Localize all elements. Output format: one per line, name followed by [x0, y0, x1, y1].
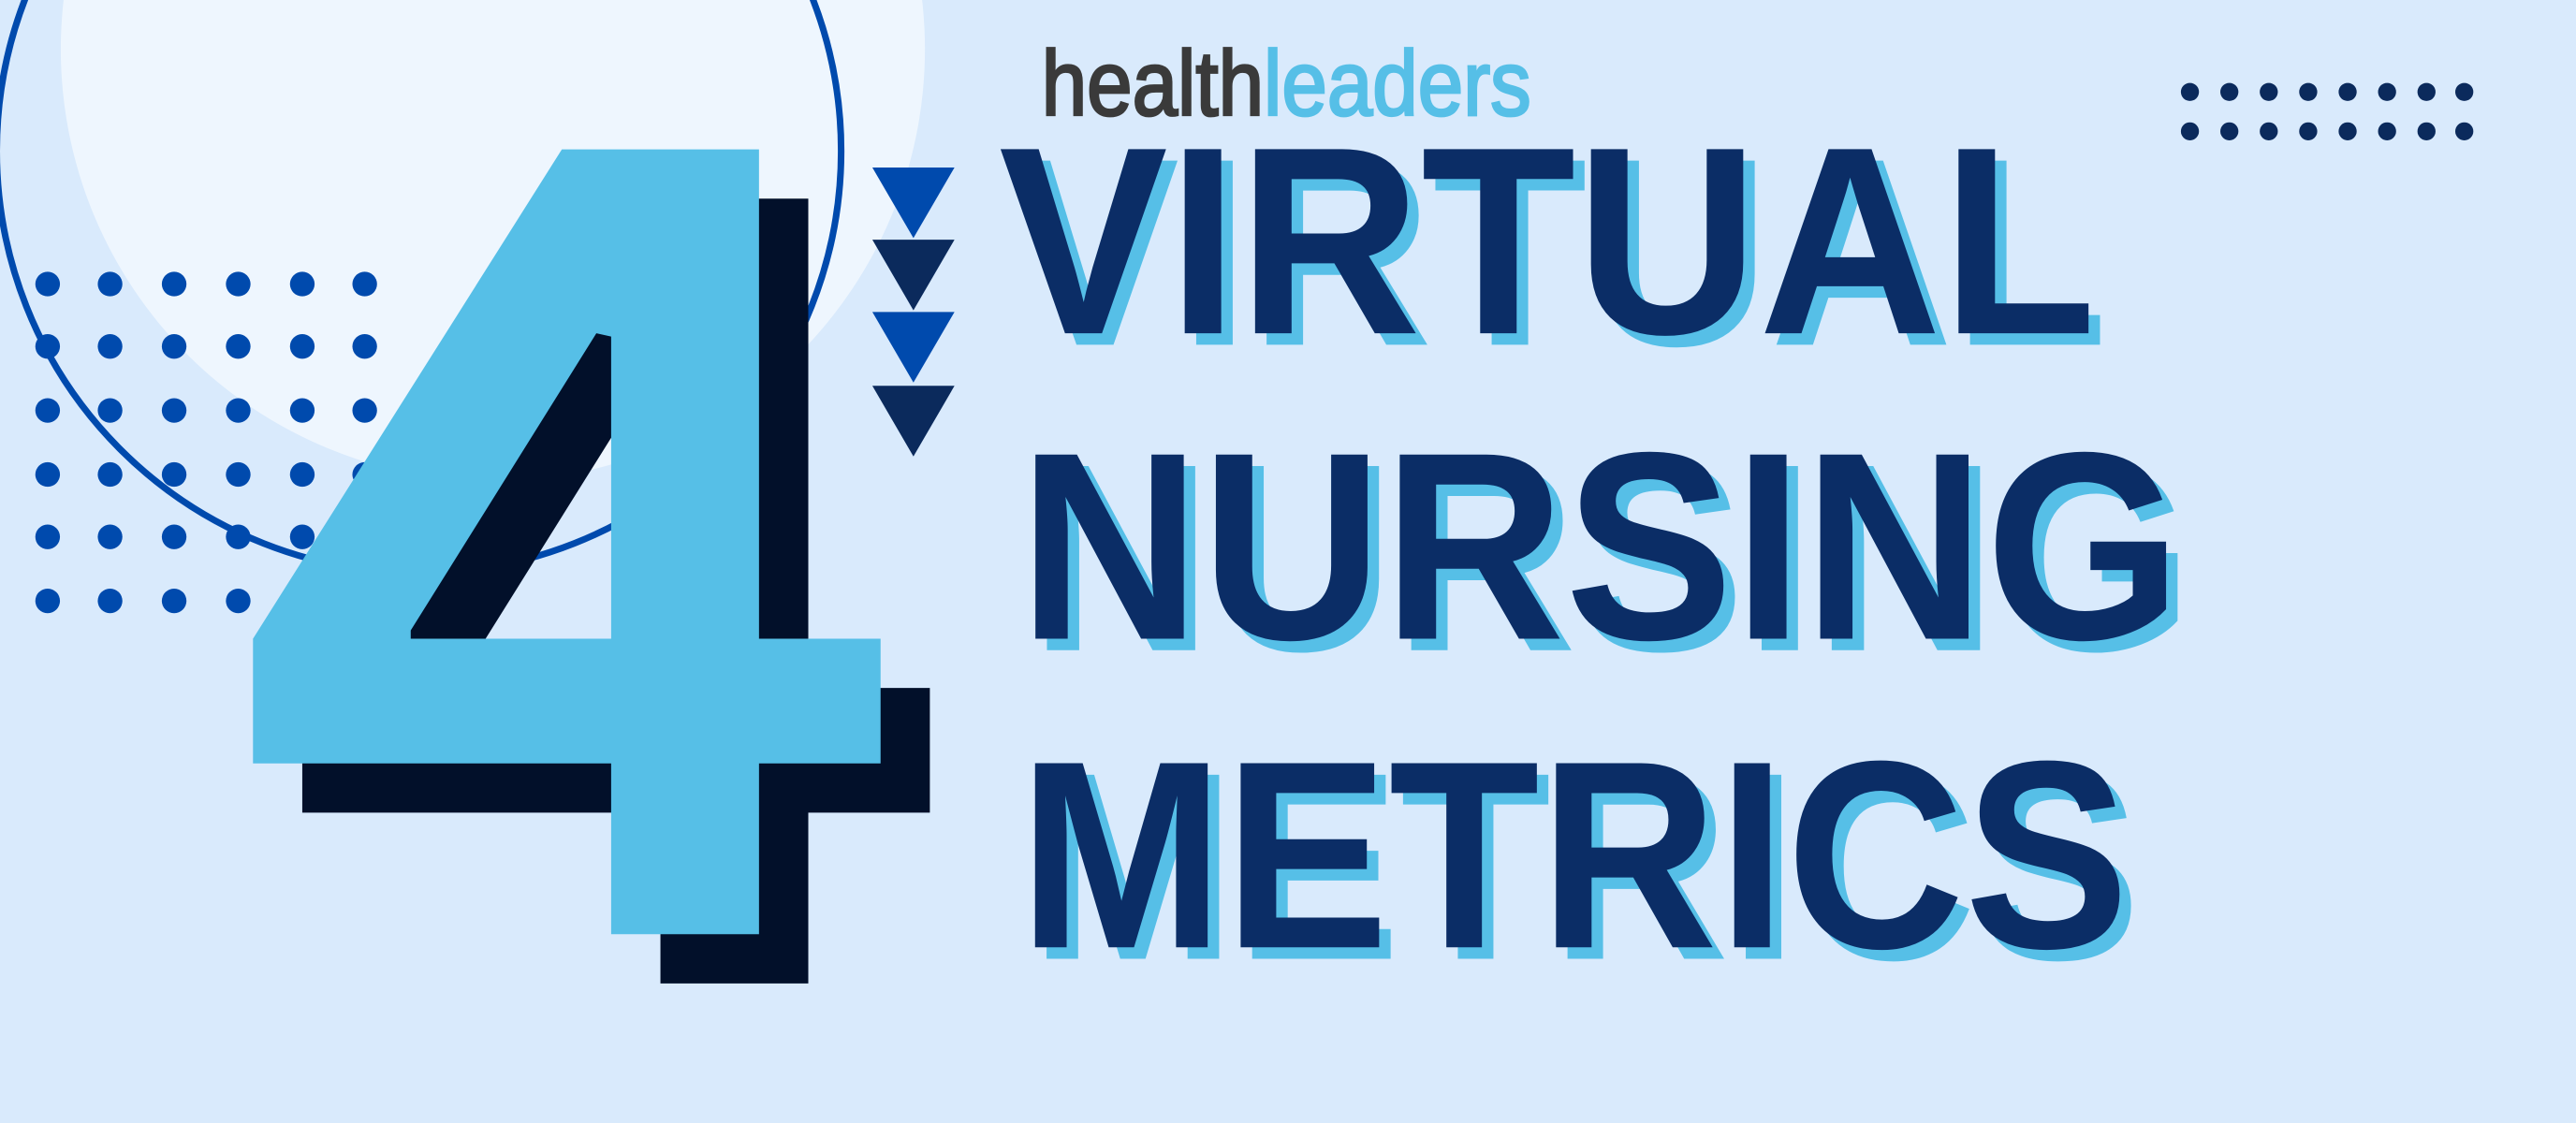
decorative ring	[0, 0, 842, 573]
title: VIRTUAL NURSING METRICS: VIRTUAL	[999, 91, 2097, 390]
decorative light circle	[61, 0, 925, 481]
dot grid left	[36, 271, 377, 613]
title: VIRTUAL NURSING METRICS: METRICS	[1030, 717, 2141, 1016]
title: VIRTUAL NURSING METRICS: NURSING	[1018, 397, 2182, 695]
title: VIRTUAL NURSING METRICS	[999, 91, 2193, 1016]
down arrow triangles	[872, 168, 955, 457]
dot grid top right	[2181, 83, 2473, 140]
logo: healthleaders: healthleaders	[1042, 32, 1531, 135]
title: VIRTUAL NURSING METRICS: VIRTUAL	[1010, 102, 2108, 401]
big number 4	[253, 150, 929, 984]
title: VIRTUAL NURSING METRICS: NURSING	[1030, 408, 2193, 707]
title: VIRTUAL NURSING METRICS: METRICS	[1018, 705, 2130, 1004]
